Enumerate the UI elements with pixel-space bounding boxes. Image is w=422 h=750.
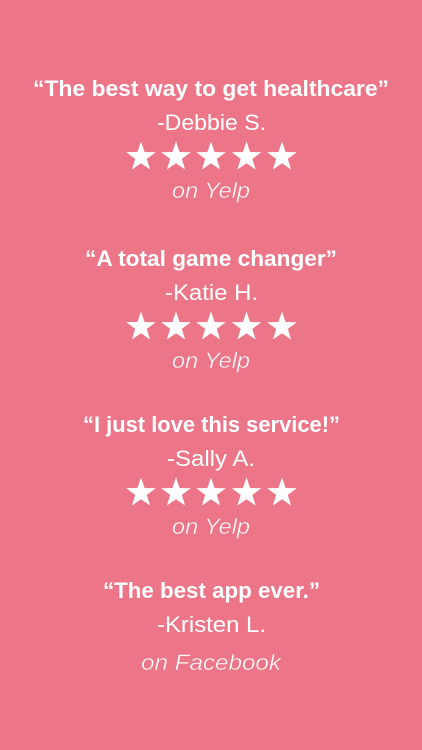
icon: five star rating bbox=[126, 478, 297, 506]
quote: best way to get healthcare: “The best way to get healthcare” bbox=[33, 76, 389, 101]
source: on Yelp: on Yelp bbox=[172, 348, 250, 373]
quote: best app ever: “The best app ever.” bbox=[103, 578, 320, 603]
review: Katie H. bbox=[85, 246, 337, 373]
reviewer: Sally A.: -Sally A. bbox=[167, 446, 255, 471]
reviewer: Kristen L.: -Kristen L. bbox=[157, 612, 266, 637]
review: Debbie S. bbox=[33, 76, 389, 203]
reviewer: Katie H.: -Katie H. bbox=[165, 280, 258, 305]
source: on Yelp: on Yelp bbox=[172, 178, 250, 203]
icon: five star rating bbox=[126, 142, 297, 170]
review: Kristen L. bbox=[103, 578, 320, 675]
icon: five star rating bbox=[126, 312, 297, 340]
review: Sally A. bbox=[83, 412, 340, 539]
quote: just love this service: “I just love this service!” bbox=[83, 412, 340, 437]
source: on Facebook: on Facebook bbox=[141, 650, 282, 675]
source: on Yelp: on Yelp bbox=[172, 514, 250, 539]
quote: total game changer: “A total game changer” bbox=[85, 246, 337, 271]
reviewer: Debbie S.: -Debbie S. bbox=[157, 110, 266, 135]
